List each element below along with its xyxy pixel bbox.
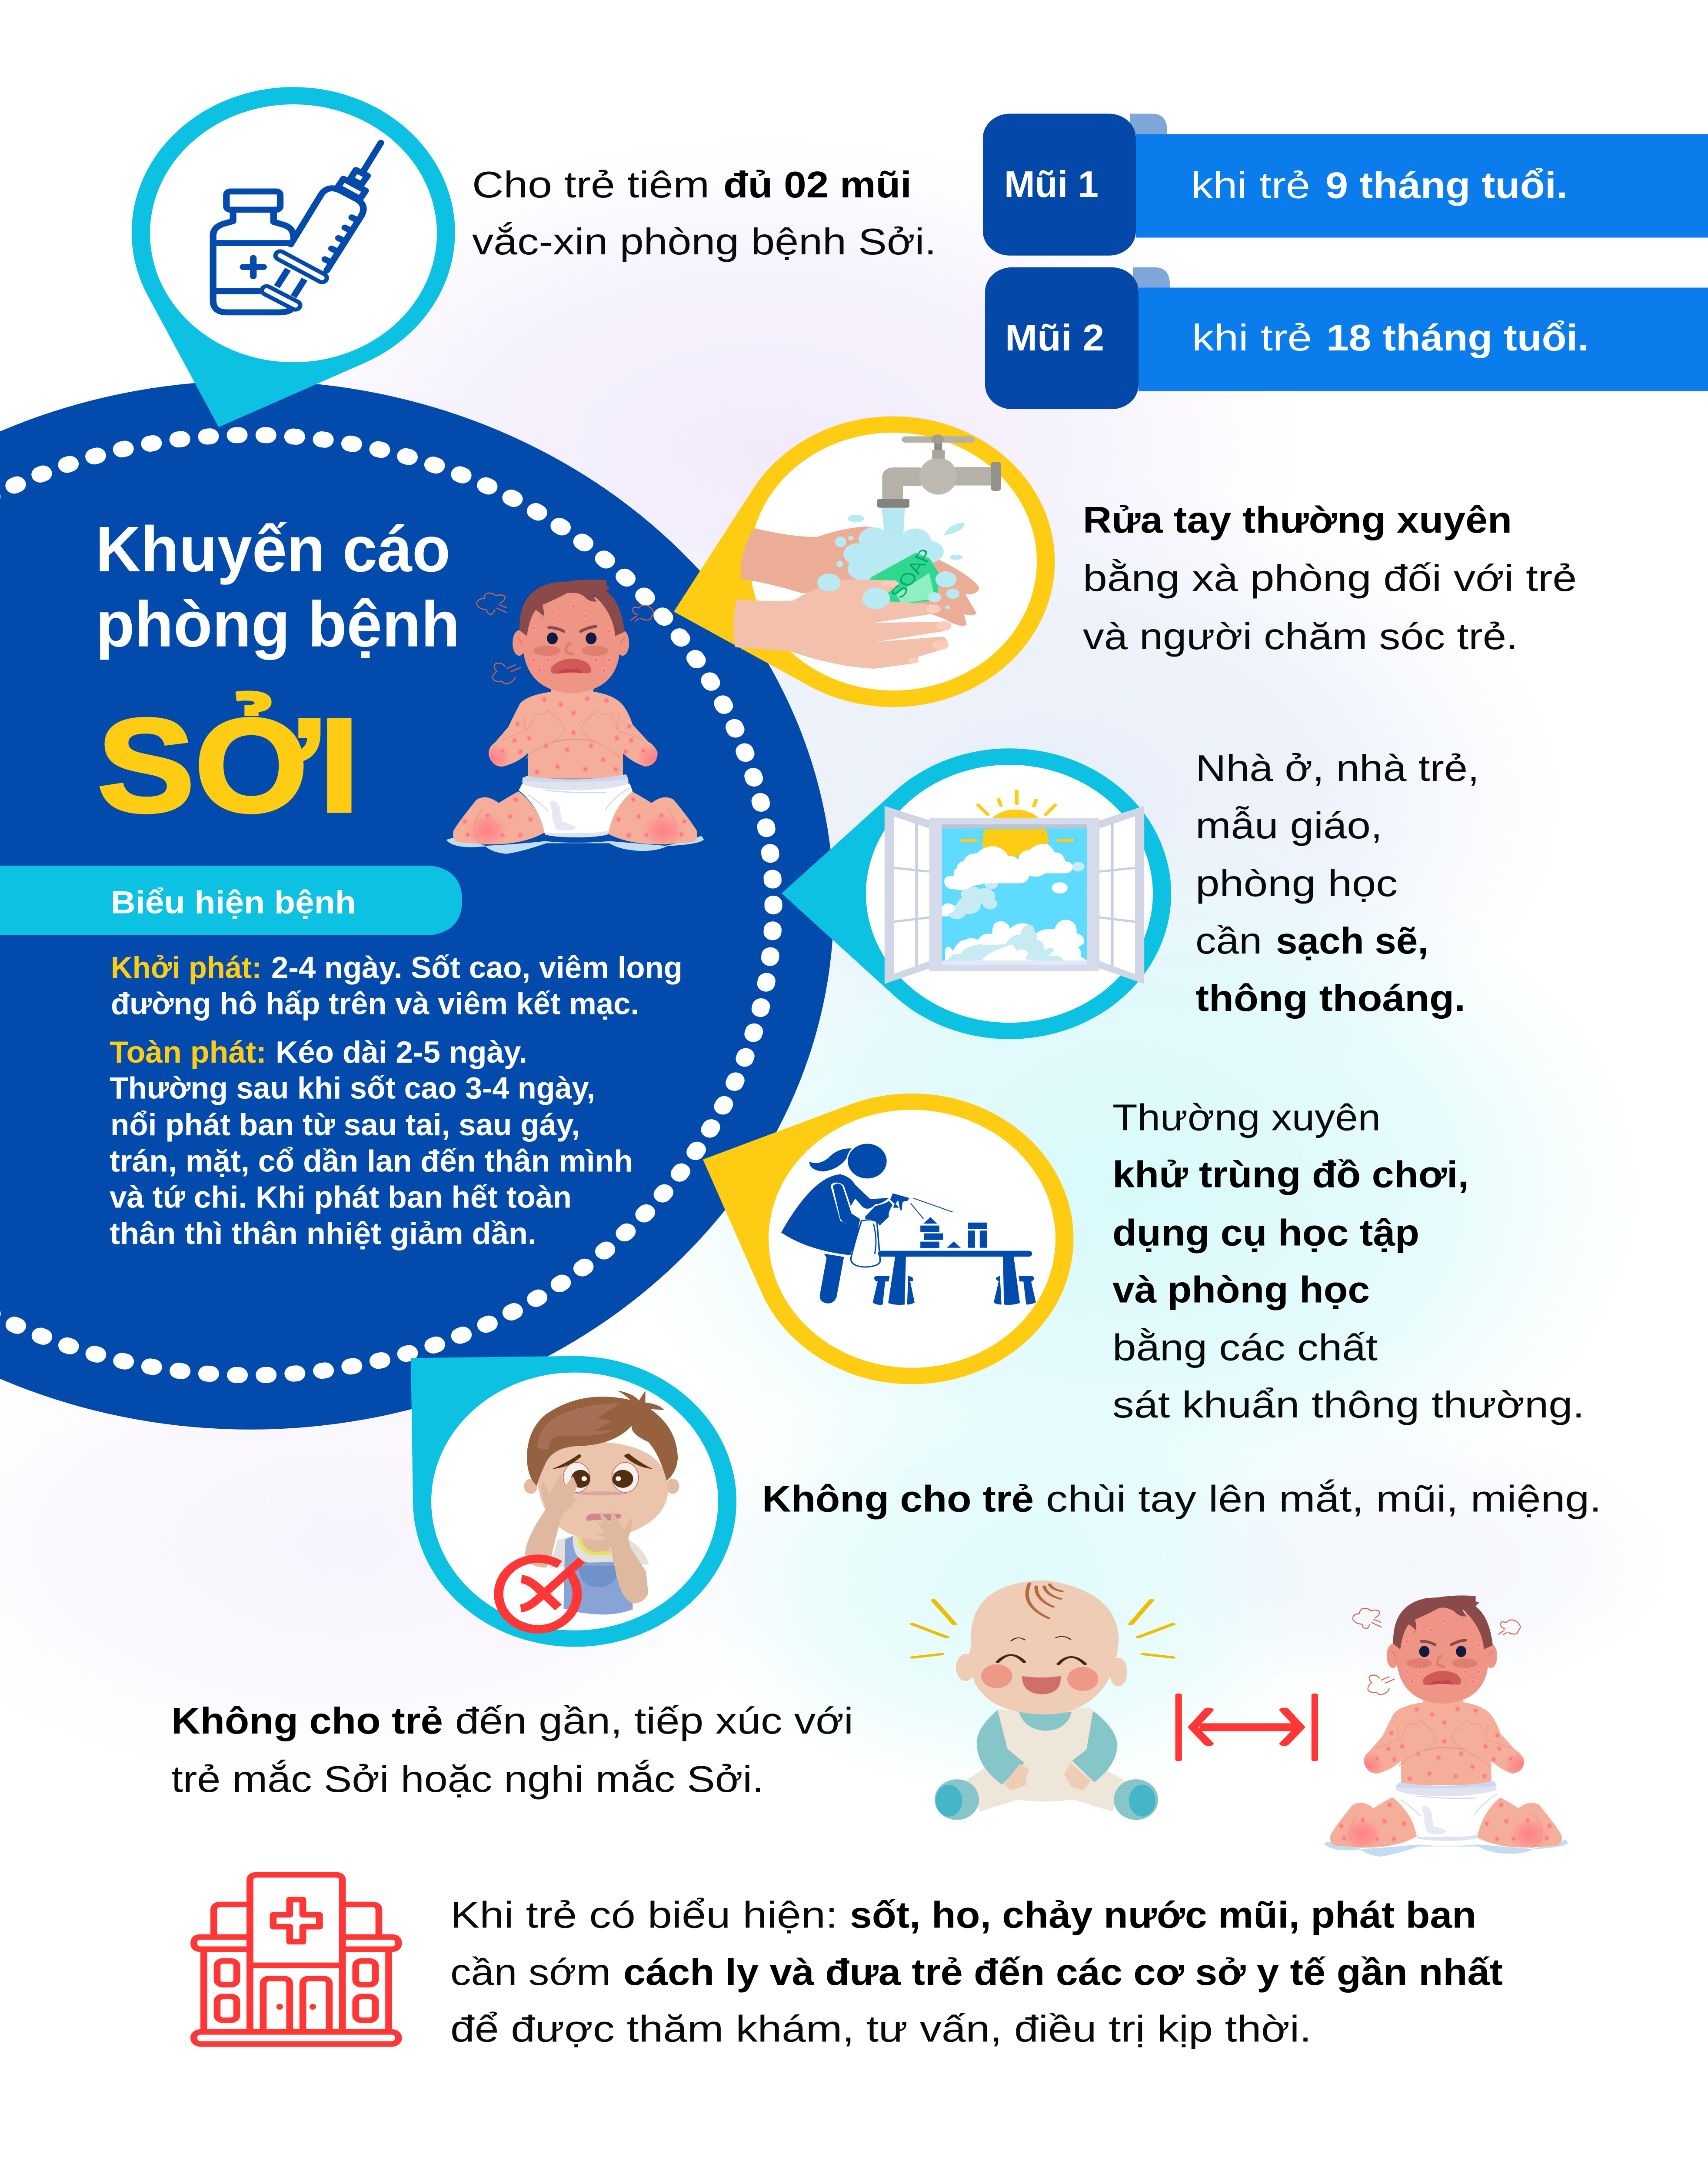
text: seek medical care: cần sớm <box>450 1951 611 1993</box>
text: hand washing advice: và người chăm sóc trẻ. <box>1083 616 1518 657</box>
text block: symptoms: và tứ chi. Khi phát ban hết toàn <box>110 1180 572 1214</box>
text block: symptoms: Khởi phát: <box>111 950 262 985</box>
text block: symptoms: trán, mặt, cổ dần lan đến thân mình <box>110 1144 633 1178</box>
panel: dose 1 ribbon: 9 tháng tuổi. <box>1325 165 1568 207</box>
heading: title: phòng bệnh <box>96 588 460 660</box>
icon: hands under faucet with soap <box>733 434 1001 669</box>
illustration: sick baby with rash <box>1324 1595 1568 1857</box>
text: do not rub eyes <box>762 1478 1601 1520</box>
heading: title: Khuyến cáo <box>96 513 450 585</box>
text: hand washing advice: bằng xà phòng đối với trẻ <box>1083 557 1577 599</box>
icon: red prohibition mark <box>499 1559 582 1629</box>
panel: symptoms label: Biểu hiện bệnh <box>111 884 356 920</box>
text: do not rub eyes: Không cho trẻ <box>762 1478 1034 1520</box>
callout: child rubbing eyes pin <box>411 1356 736 1647</box>
text: avoid contact: Không cho trẻ <box>171 1700 443 1742</box>
text: disinfection advice: Thường xuyên <box>1112 1097 1381 1138</box>
panel: main blue circle <box>0 380 834 1430</box>
text: seek medical care: sốt, ho, chảy nước mũi, phát ban <box>850 1894 1476 1936</box>
text: vaccination advice: đủ 02 mũi <box>723 164 912 206</box>
text: clean ventilated rooms: cần <box>1195 920 1262 962</box>
text block: symptoms: Kéo dài 2-5 ngày. <box>276 1035 527 1069</box>
text: clean ventilated rooms: thông thoáng. <box>1195 978 1465 1019</box>
text: disinfection advice <box>1112 1097 1585 1426</box>
text: do not rub eyes: chùi tay lên mắt, mũi, miệng. <box>1046 1478 1601 1520</box>
text: seek medical care: Khi trẻ có biểu hiện: <box>450 1894 838 1936</box>
text: vaccination advice <box>472 164 936 263</box>
text: avoid contact: đến gần, tiếp xúc với <box>455 1700 853 1742</box>
icon: hospital <box>194 1875 399 2044</box>
heading: title <box>96 513 460 840</box>
illustration: healthy happy baby <box>912 1580 1173 1820</box>
icon: woman spraying toys on table <box>781 1144 1036 1305</box>
callout: disinfecting pin <box>703 1094 1073 1384</box>
text block: symptoms: đường hô hấp trên và viêm kết mạc. <box>111 987 639 1021</box>
panel: dose 2 ribbon <box>985 267 1708 409</box>
icon: open window with sun and clouds <box>885 791 1144 984</box>
icon: child touching eye and mouth <box>499 1390 679 1629</box>
text block: symptoms: 2-4 ngày. Sốt cao, viêm long <box>271 950 683 985</box>
illustration: baby with measles rash <box>446 580 704 854</box>
text: clean ventilated rooms: sạch sẽ, <box>1276 920 1428 962</box>
text: clean ventilated rooms <box>1195 747 1479 1019</box>
text: avoid contact: trẻ mắc Sởi hoặc nghi mắc Sởi. <box>171 1758 764 1800</box>
icon: vaccine vial and syringe <box>213 143 381 312</box>
panel: dose 1 ribbon: khi trẻ <box>1191 165 1310 207</box>
panel: dose 2 ribbon: khi trẻ <box>1192 317 1312 359</box>
text: vaccination advice: vắc-xin phòng bệnh Sởi. <box>472 221 936 263</box>
text block: symptoms: Thường sau khi sốt cao 3-4 ngày, <box>110 1071 595 1105</box>
panel: symptoms label <box>0 866 462 935</box>
text: clean ventilated rooms: phòng học <box>1195 863 1398 904</box>
callout: open window pin <box>782 748 1171 1039</box>
panel: dose 2 ribbon: 18 tháng tuổi. <box>1326 317 1589 359</box>
text: clean ventilated rooms: Nhà ở, nhà trẻ, <box>1195 747 1479 789</box>
text: seek medical care <box>450 1894 1503 2050</box>
arrow: keep distance <box>1179 1695 1315 1760</box>
panel: dose 1 ribbon <box>983 114 1708 256</box>
icon: hands under faucet with soap: SOAP <box>885 546 938 601</box>
text: seek medical care: cách ly và đưa trẻ đến các cơ sở y tế gần nhất <box>623 1951 1503 1993</box>
text: seek medical care: để được thăm khám, tư vấn, điều trị kịp thời. <box>450 2008 1312 2050</box>
text block: symptoms <box>110 950 683 1250</box>
text: disinfection advice: dụng cụ học tập <box>1112 1212 1419 1254</box>
heading: title: SỞI <box>97 691 360 840</box>
text block: symptoms: thân thì thân nhiệt giảm dần. <box>110 1217 536 1250</box>
text: disinfection advice: khử trùng đồ chơi, <box>1112 1154 1469 1195</box>
text: disinfection advice: sát khuẩn thông thường. <box>1112 1384 1585 1426</box>
text: clean ventilated rooms: mẫu giáo, <box>1195 805 1382 847</box>
text block: symptoms: Toàn phát: <box>110 1035 266 1069</box>
text block: symptoms: nổi phát ban từ sau tai, sau gáy, <box>110 1108 580 1142</box>
dotted ring <box>0 435 773 1375</box>
panel: dose 1 ribbon: Mũi 1 <box>1004 163 1099 205</box>
text: disinfection advice: và phòng học <box>1112 1269 1370 1311</box>
text: avoid contact <box>171 1700 853 1800</box>
callout: hand washing pin <box>674 416 1055 707</box>
text: disinfection advice: bằng các chất <box>1112 1327 1378 1369</box>
callout: vaccine pin <box>132 87 455 427</box>
panel: dose 2 ribbon: Mũi 2 <box>1005 317 1104 359</box>
text: vaccination advice: Cho trẻ tiêm <box>472 164 709 206</box>
text: hand washing advice <box>1083 499 1577 657</box>
text: hand washing advice: Rửa tay thường xuyên <box>1083 499 1512 541</box>
